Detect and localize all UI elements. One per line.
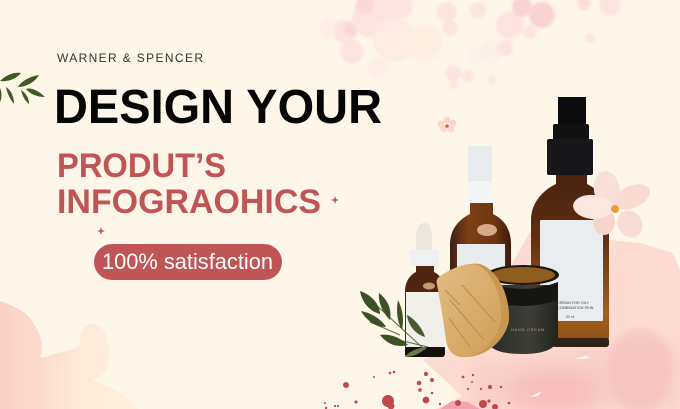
large amber spray bottle: COMBINATION SKIN <box>557 306 594 310</box>
wooden lid <box>437 264 509 357</box>
brand name: WARNER & SPENCER <box>57 51 203 65</box>
watercolor: bottom left wash <box>0 301 138 409</box>
watercolor: bottom right wash <box>423 232 680 409</box>
watercolor: top blossoms <box>320 0 621 89</box>
amber jar: HAND CREAM <box>511 328 545 332</box>
badge <box>94 244 282 280</box>
badge: 100% satisfaction <box>102 249 273 274</box>
amber jar <box>487 265 559 354</box>
ink splatter <box>324 371 510 409</box>
large amber spray bottle: CREAM FOR OILY <box>557 301 590 305</box>
pink flower <box>572 169 654 242</box>
subtitle: PRODUT’S <box>57 147 226 185</box>
subtitle <box>57 147 321 221</box>
olive branch <box>360 291 428 357</box>
icon: sparkle left <box>97 227 105 235</box>
large amber spray bottle <box>531 97 609 347</box>
title: DESIGN YOUR <box>54 80 382 134</box>
medium amber spray bottle <box>450 146 511 272</box>
small blossom <box>438 116 456 132</box>
small dropper bottle <box>405 223 445 357</box>
icon: sparkle right <box>331 196 339 204</box>
subtitle: INFOGRAOHICS <box>57 183 321 221</box>
icon: leaves top left <box>0 73 45 104</box>
large amber spray bottle: 50 ml <box>566 315 575 319</box>
